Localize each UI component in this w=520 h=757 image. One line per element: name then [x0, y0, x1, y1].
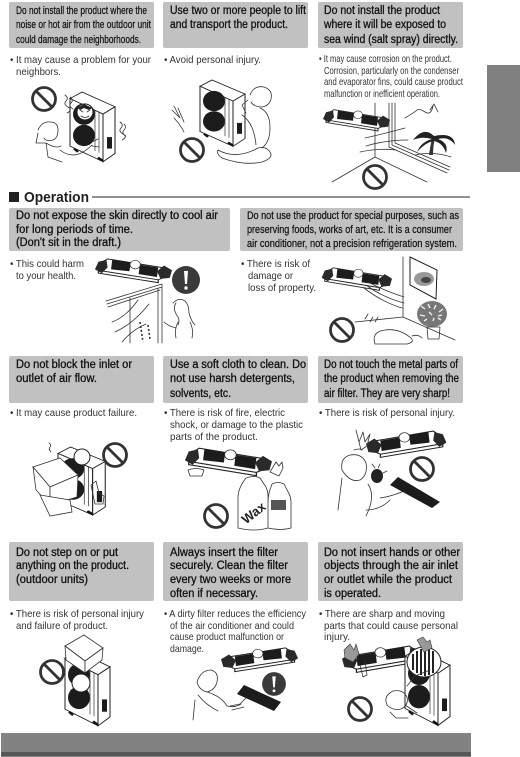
heading: block inlet: outlet of air flow.	[16, 373, 97, 385]
icon: prohibition sign	[364, 166, 386, 188]
illustration: person inserting filter	[193, 648, 298, 720]
text: filter note: cause product malfunction or	[170, 631, 284, 643]
heading: soft cloth: not use harsh detergents,	[170, 373, 295, 385]
panel: sea wind warning	[318, 2, 463, 188]
icon: prohibition sign	[180, 138, 204, 162]
text: neighbours noise note: • It may cause a problem for your	[10, 54, 151, 66]
text: neighbours noise note	[10, 54, 151, 78]
heading: soft cloth: solvents, etc.	[170, 388, 231, 400]
heading: soft cloth: Use a soft cloth to clean. Do	[170, 359, 306, 371]
heading: do not step: Do not step on or put	[16, 547, 119, 559]
text: sea wind note: Corrosion, particularly on the condenser	[324, 65, 459, 77]
heading: filter: Always insert the filter	[170, 547, 278, 559]
icon: prohibition sign	[104, 444, 126, 466]
text: insert hands note: injury.	[324, 631, 350, 643]
text: cool air note: to your health.	[16, 270, 76, 282]
heading: neighbours noise	[16, 5, 151, 46]
heading: neighbours noise: Do not install the product where the	[16, 5, 147, 17]
heading: metal parts	[324, 359, 459, 400]
text: insert hands note: • There are sharp and moving	[319, 608, 445, 620]
heading: Operation: Operation	[24, 189, 89, 206]
icon: warning sign	[172, 266, 200, 294]
heading: two people	[170, 5, 307, 31]
heading: two people: and transport the product.	[170, 19, 288, 31]
heading: block inlet	[16, 359, 132, 385]
heading: cool air: (Don't sit in the draft.)	[16, 237, 121, 249]
text: do not step note	[10, 608, 145, 632]
panel: insert hands	[318, 542, 463, 726]
heading: filter: securely. Clean the filter	[170, 560, 288, 572]
text: filter note: • A dirty filter reduces the efficiency	[164, 608, 307, 620]
panel: do not step	[9, 542, 154, 726]
panel: filter	[163, 542, 308, 720]
heading: special purposes: preserving foods, works of art, etc. It is a consumer	[247, 224, 452, 236]
heading: metal parts: air filter. They are very sharp!	[324, 388, 450, 400]
heading: sea wind: Do not install the product	[324, 5, 441, 17]
label: wax bottle: Wax	[239, 498, 269, 527]
text: do not step note: and failure of product.	[16, 620, 108, 632]
illustration: carrying outdoor unit	[172, 80, 271, 163]
heading: sea wind	[323, 5, 458, 46]
text: soft cloth note: parts of the product.	[170, 431, 258, 443]
icon: prohibition sign	[330, 318, 354, 342]
heading: metal parts: the product when removing the	[324, 373, 459, 385]
text: sea wind note: and evaporator fins, could cause product	[324, 76, 463, 88]
text: special purposes note	[241, 258, 316, 294]
heading: neighbours noise: could damage the neighborhoods.	[16, 34, 141, 46]
heading: filter	[170, 547, 291, 600]
heading: insert hands: objects through the air inlet	[324, 560, 459, 572]
heading: special purposes	[247, 210, 459, 250]
text: sea wind note	[319, 53, 463, 100]
icon: prohibition sign	[348, 698, 372, 720]
illustration: air blowing on woman	[95, 259, 195, 343]
illustration: person hurt removing filter	[338, 430, 446, 516]
illustration: boxes against outdoor unit	[33, 443, 105, 516]
panel: cool air exposure	[9, 208, 230, 343]
icon: warning sign	[262, 672, 286, 696]
icon: prohibition sign	[204, 504, 228, 528]
heading: filter: every two weeks or more	[170, 574, 291, 586]
panel: two-person transport	[163, 2, 308, 163]
text: filter note	[164, 608, 307, 655]
text: neighbours noise note: neighbors.	[16, 66, 61, 78]
footer bar	[1, 733, 471, 757]
illustration: unit by seaside window	[323, 103, 455, 182]
illustration: unit with wax bottles	[185, 448, 291, 530]
heading: do not step: anything on the product.	[16, 560, 129, 572]
heading: Operation	[9, 189, 470, 206]
text: filter note: of the air conditioner and could	[170, 620, 294, 632]
heading: filter: often if necessary.	[170, 588, 258, 600]
heading: insert hands	[324, 547, 460, 600]
text: special purposes note: loss of property.	[248, 282, 316, 294]
text: block inlet note: • It may cause product failure.	[10, 407, 137, 419]
heading: do not step	[16, 547, 129, 586]
illustration: hands near fan and unit	[342, 637, 450, 726]
heading: sea wind: sea wind (salt spray) directly.	[324, 34, 458, 46]
heading: block inlet: Do not block the inlet or	[16, 359, 132, 371]
heading: special purposes: Do not use the product for special purposes, such as	[247, 210, 459, 222]
panel: special purposes	[240, 208, 463, 344]
panel: metal parts	[318, 356, 463, 516]
panel: block inlet	[9, 356, 154, 516]
text: special purposes note: • There is risk of	[241, 258, 310, 270]
heading: insert hands: is operated.	[324, 588, 381, 600]
heading: soft cloth	[170, 359, 306, 400]
side tab	[487, 65, 520, 172]
illustration: room with art, plant and pet	[322, 257, 455, 344]
heading: special purposes: air conditioner, not a precision refrigeration system.	[247, 238, 457, 250]
text: sea wind note: malfunction or inefficient operation.	[324, 88, 440, 100]
text: two people note: • Avoid personal injury.	[164, 54, 261, 66]
heading: cool air: Do not expose the skin directly to cool air	[16, 210, 218, 222]
text: soft cloth note: • There is risk of fire, electric	[164, 407, 285, 419]
icon: prohibition sign	[40, 660, 64, 684]
heading: cool air	[16, 210, 218, 249]
illustration: person by noisy outdoor unit	[36, 92, 126, 162]
text: insert hands note: parts that could cause personal	[324, 620, 458, 632]
heading: insert hands: Do not insert hands or other	[324, 547, 460, 559]
panel: neighbours noise warning	[9, 2, 154, 162]
text: sea wind note: • It may cause corrosion on the product.	[319, 53, 452, 65]
text: cool air note	[10, 258, 84, 282]
icon: prohibition sign	[32, 88, 56, 110]
heading: two people: Use two or more people to lift	[170, 5, 307, 17]
text: do not step note: • There is risk of personal injury	[10, 608, 145, 620]
text: insert hands note	[319, 608, 458, 643]
heading: cool air: for long periods of time.	[16, 224, 133, 236]
text: cool air note: • This could harm	[10, 258, 84, 270]
text: special purposes note: damage or	[248, 270, 293, 282]
text: soft cloth note	[164, 407, 303, 443]
heading: do not step: (outdoor units)	[16, 574, 88, 586]
heading: metal parts: Do not touch the metal parts of	[324, 359, 459, 371]
text: metal parts note: • There is risk of personal injury.	[319, 407, 455, 419]
illustration: box on outdoor unit	[65, 635, 110, 726]
heading: neighbours noise: noise or hot air from the outdoor unit	[16, 19, 151, 31]
icon: prohibition sign	[410, 458, 434, 480]
panel: soft cloth	[163, 356, 308, 530]
text: filter note: damage.	[170, 643, 204, 655]
heading: sea wind: where it will be exposed to	[323, 19, 446, 31]
text: soft cloth note: shock, or damage to the plastic	[170, 419, 303, 431]
heading: insert hands: or outlet while the product	[324, 574, 453, 586]
